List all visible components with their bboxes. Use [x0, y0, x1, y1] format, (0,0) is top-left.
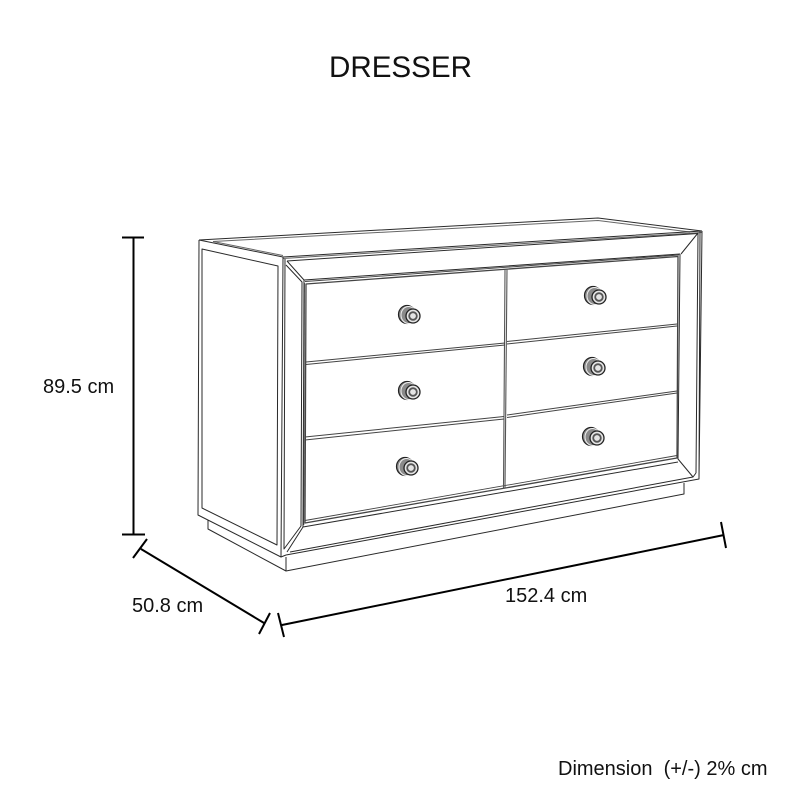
dresser line drawing — [198, 218, 702, 571]
knob: top right — [584, 286, 606, 304]
plinth base — [208, 483, 684, 571]
knob: bottom left — [396, 458, 418, 476]
height dimension line — [122, 238, 145, 534]
width label: 152.4 cm — [505, 585, 587, 607]
front frame — [281, 231, 702, 557]
knob: top left — [398, 306, 420, 324]
drawer knobs — [396, 286, 606, 476]
depth dimension line — [133, 539, 270, 634]
height label: 89.5 cm — [43, 376, 114, 398]
dimension tolerance note: Dimension (+/-) 2% cm — [558, 758, 768, 780]
drawer dividers — [305, 269, 677, 488]
side panel — [198, 240, 283, 557]
width dimension line — [278, 522, 726, 637]
knob: bottom right — [582, 428, 604, 446]
drawer panel outline — [304, 255, 679, 525]
knob: middle right — [584, 358, 605, 376]
knob: middle left — [398, 382, 420, 400]
depth label: 50.8 cm — [132, 595, 203, 617]
dresser top surface — [199, 218, 702, 258]
title: DRESSER — [329, 51, 472, 84]
